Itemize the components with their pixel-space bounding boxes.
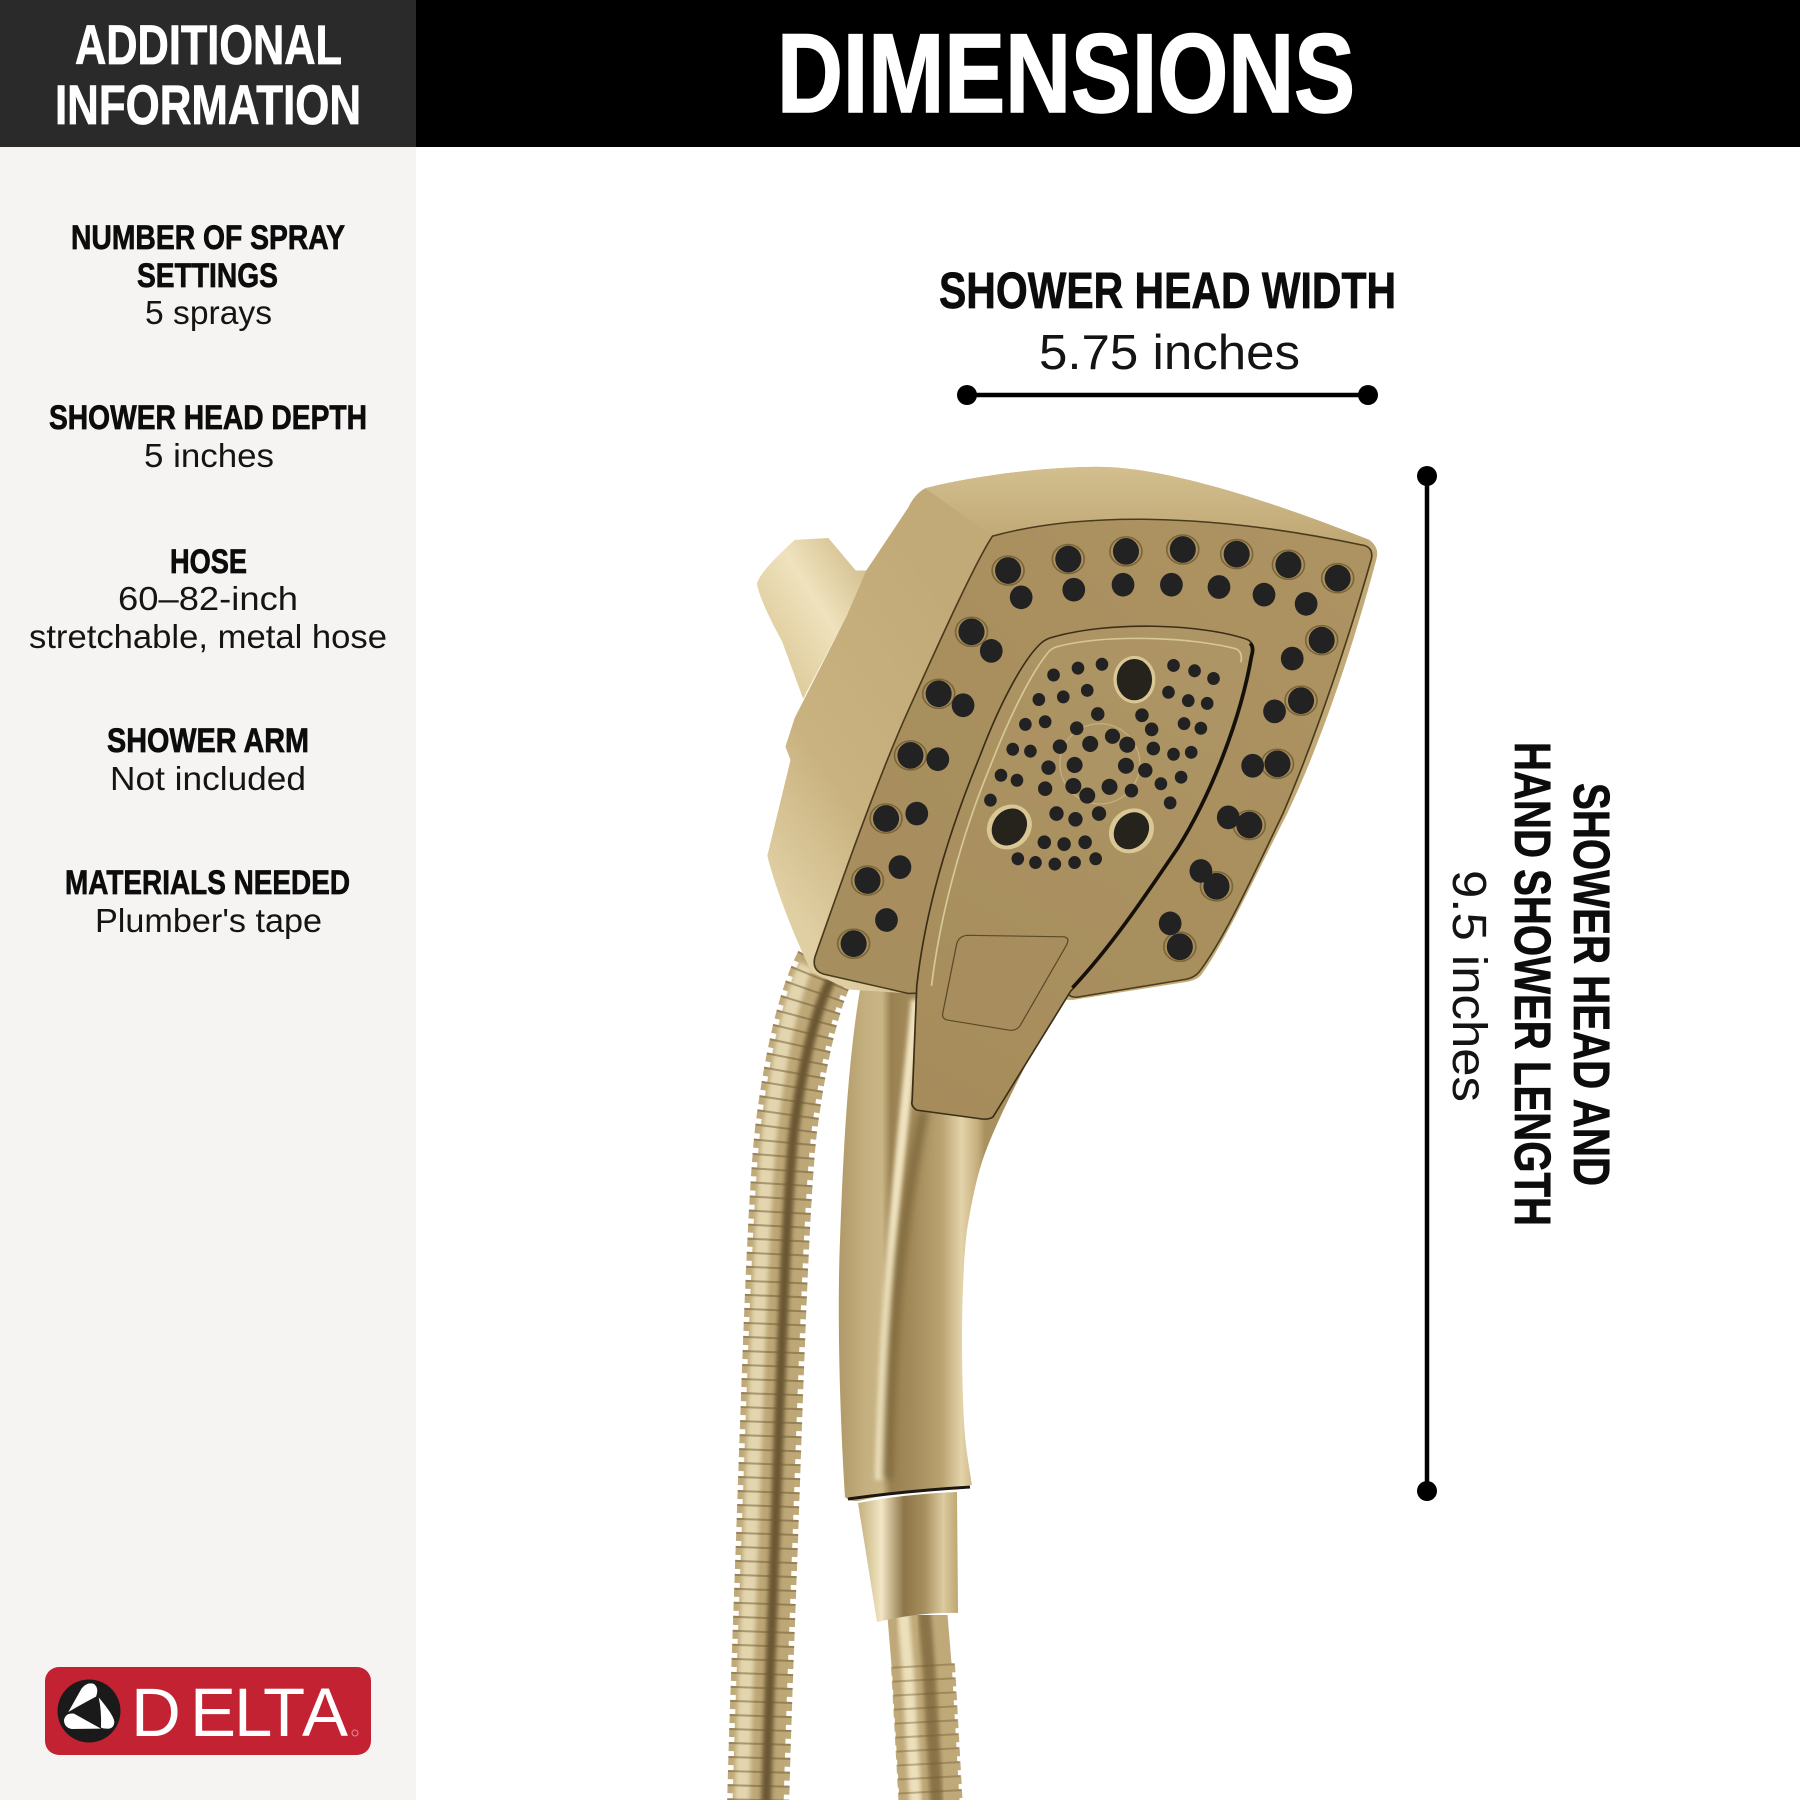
sidebar heading: additional information (0, 0, 416, 147)
mounting connector (757, 538, 870, 699)
spec: materials needed: MATERIALS NEEDED (65, 864, 350, 902)
outer spray nozzles, small (875, 573, 1317, 935)
sidebar heading: additional information: ADDITIONAL (75, 13, 342, 76)
handle button (943, 935, 1068, 1030)
spec: number of spray settings: 5 sprays (145, 294, 272, 331)
hose collar (858, 1492, 958, 1622)
spec: shower head depth (49, 399, 367, 474)
length label, rotated: SHOWER HEAD AND (1563, 783, 1620, 1186)
head body (767, 467, 1377, 1000)
right hose below collar (903, 1610, 937, 1800)
spec: hose: stretchable, metal hose (29, 618, 387, 655)
spec: shower head depth: 5 inches (144, 437, 274, 474)
spec: materials needed (65, 864, 350, 939)
left flexible hose (742, 965, 836, 1800)
shower head width label: 5.75 inches (1039, 326, 1300, 380)
length label, rotated (1442, 742, 1620, 1226)
centre spray panel (912, 626, 1253, 1119)
spec: number of spray settings: NUMBER OF SPRAY (71, 219, 345, 257)
panel groove and rim (932, 638, 1253, 988)
spec: number of spray settings (71, 219, 345, 331)
top header bar (416, 0, 1800, 147)
spec: number of spray settings: SETTINGS (137, 257, 278, 295)
length label, rotated: 9.5 inches (1442, 870, 1495, 1102)
spec: hose: 60–82-inch (118, 580, 298, 617)
spec: hose (29, 543, 387, 655)
outer spray rings (838, 535, 1354, 961)
outer spray nozzles, large (841, 536, 1351, 960)
handle (839, 990, 1060, 1501)
spec: materials needed: Plumber's tape (95, 902, 322, 939)
shower head width label: SHOWER HEAD WIDTH (939, 262, 1396, 319)
delta logo (45, 1667, 371, 1755)
length dimension line (1417, 466, 1437, 1501)
spec: shower head depth: SHOWER HEAD DEPTH (49, 399, 367, 437)
spec: shower arm: SHOWER ARM (107, 722, 309, 760)
delta logo: DELTA (131, 1674, 348, 1751)
centre spray nozzles (984, 658, 1220, 871)
length label, rotated: HAND SHOWER LENGTH (1504, 742, 1561, 1226)
sidebar panel (0, 147, 416, 1800)
shower head (757, 467, 1377, 1119)
spray faceplate (814, 519, 1372, 997)
spec: shower arm (107, 722, 309, 797)
centre disc (1060, 724, 1140, 804)
title: dimensions: DIMENSIONS (777, 11, 1355, 136)
shower head width label (939, 262, 1396, 380)
top face of body (925, 467, 1369, 546)
large spray jets (979, 656, 1162, 860)
spec: hose: HOSE (170, 543, 247, 581)
spec: shower arm: Not included (110, 760, 306, 797)
sidebar heading: additional information: INFORMATION (55, 73, 361, 136)
width dimension line (957, 385, 1378, 405)
